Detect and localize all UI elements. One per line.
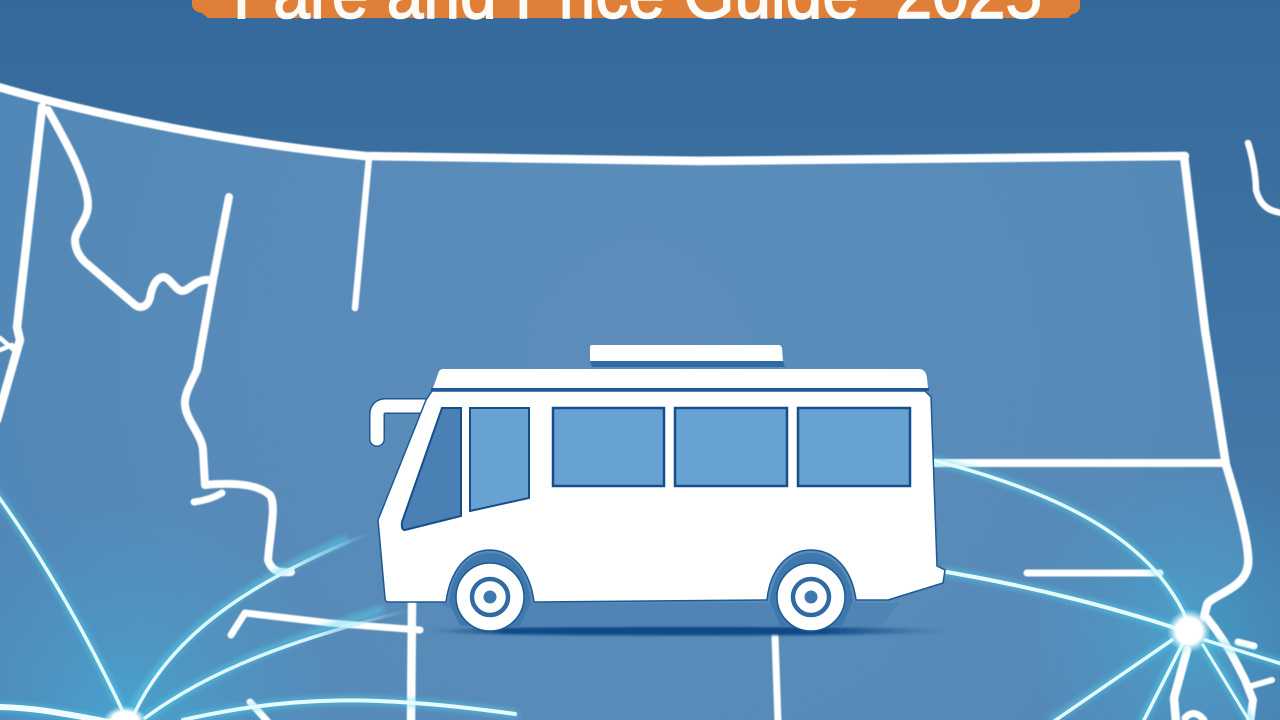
hub glow areas — [0, 440, 1280, 720]
window 3 — [798, 408, 910, 486]
rear wheel — [777, 563, 845, 631]
window 2 — [675, 408, 787, 486]
mirror — [377, 406, 430, 439]
hub node: right — [1167, 609, 1211, 653]
windshield — [402, 408, 461, 530]
glowing route lines: right hub — [932, 460, 1280, 720]
orange title banner — [192, 0, 1080, 34]
roof vent — [590, 345, 783, 361]
glowing route lines: left hub — [0, 492, 515, 720]
roof — [433, 369, 928, 388]
icon: bus — [377, 345, 955, 636]
wheel arch fill: rear — [770, 553, 853, 626]
window 1 — [553, 408, 664, 486]
route glow halos — [0, 460, 1280, 720]
hub node: left — [103, 706, 147, 720]
under-bus band — [440, 603, 900, 627]
bus body — [378, 391, 945, 602]
bus ground shadow — [425, 626, 955, 636]
door window — [470, 408, 529, 511]
front wheel — [456, 563, 524, 631]
wheel arch fill: front — [449, 553, 531, 626]
roof line — [431, 388, 929, 391]
